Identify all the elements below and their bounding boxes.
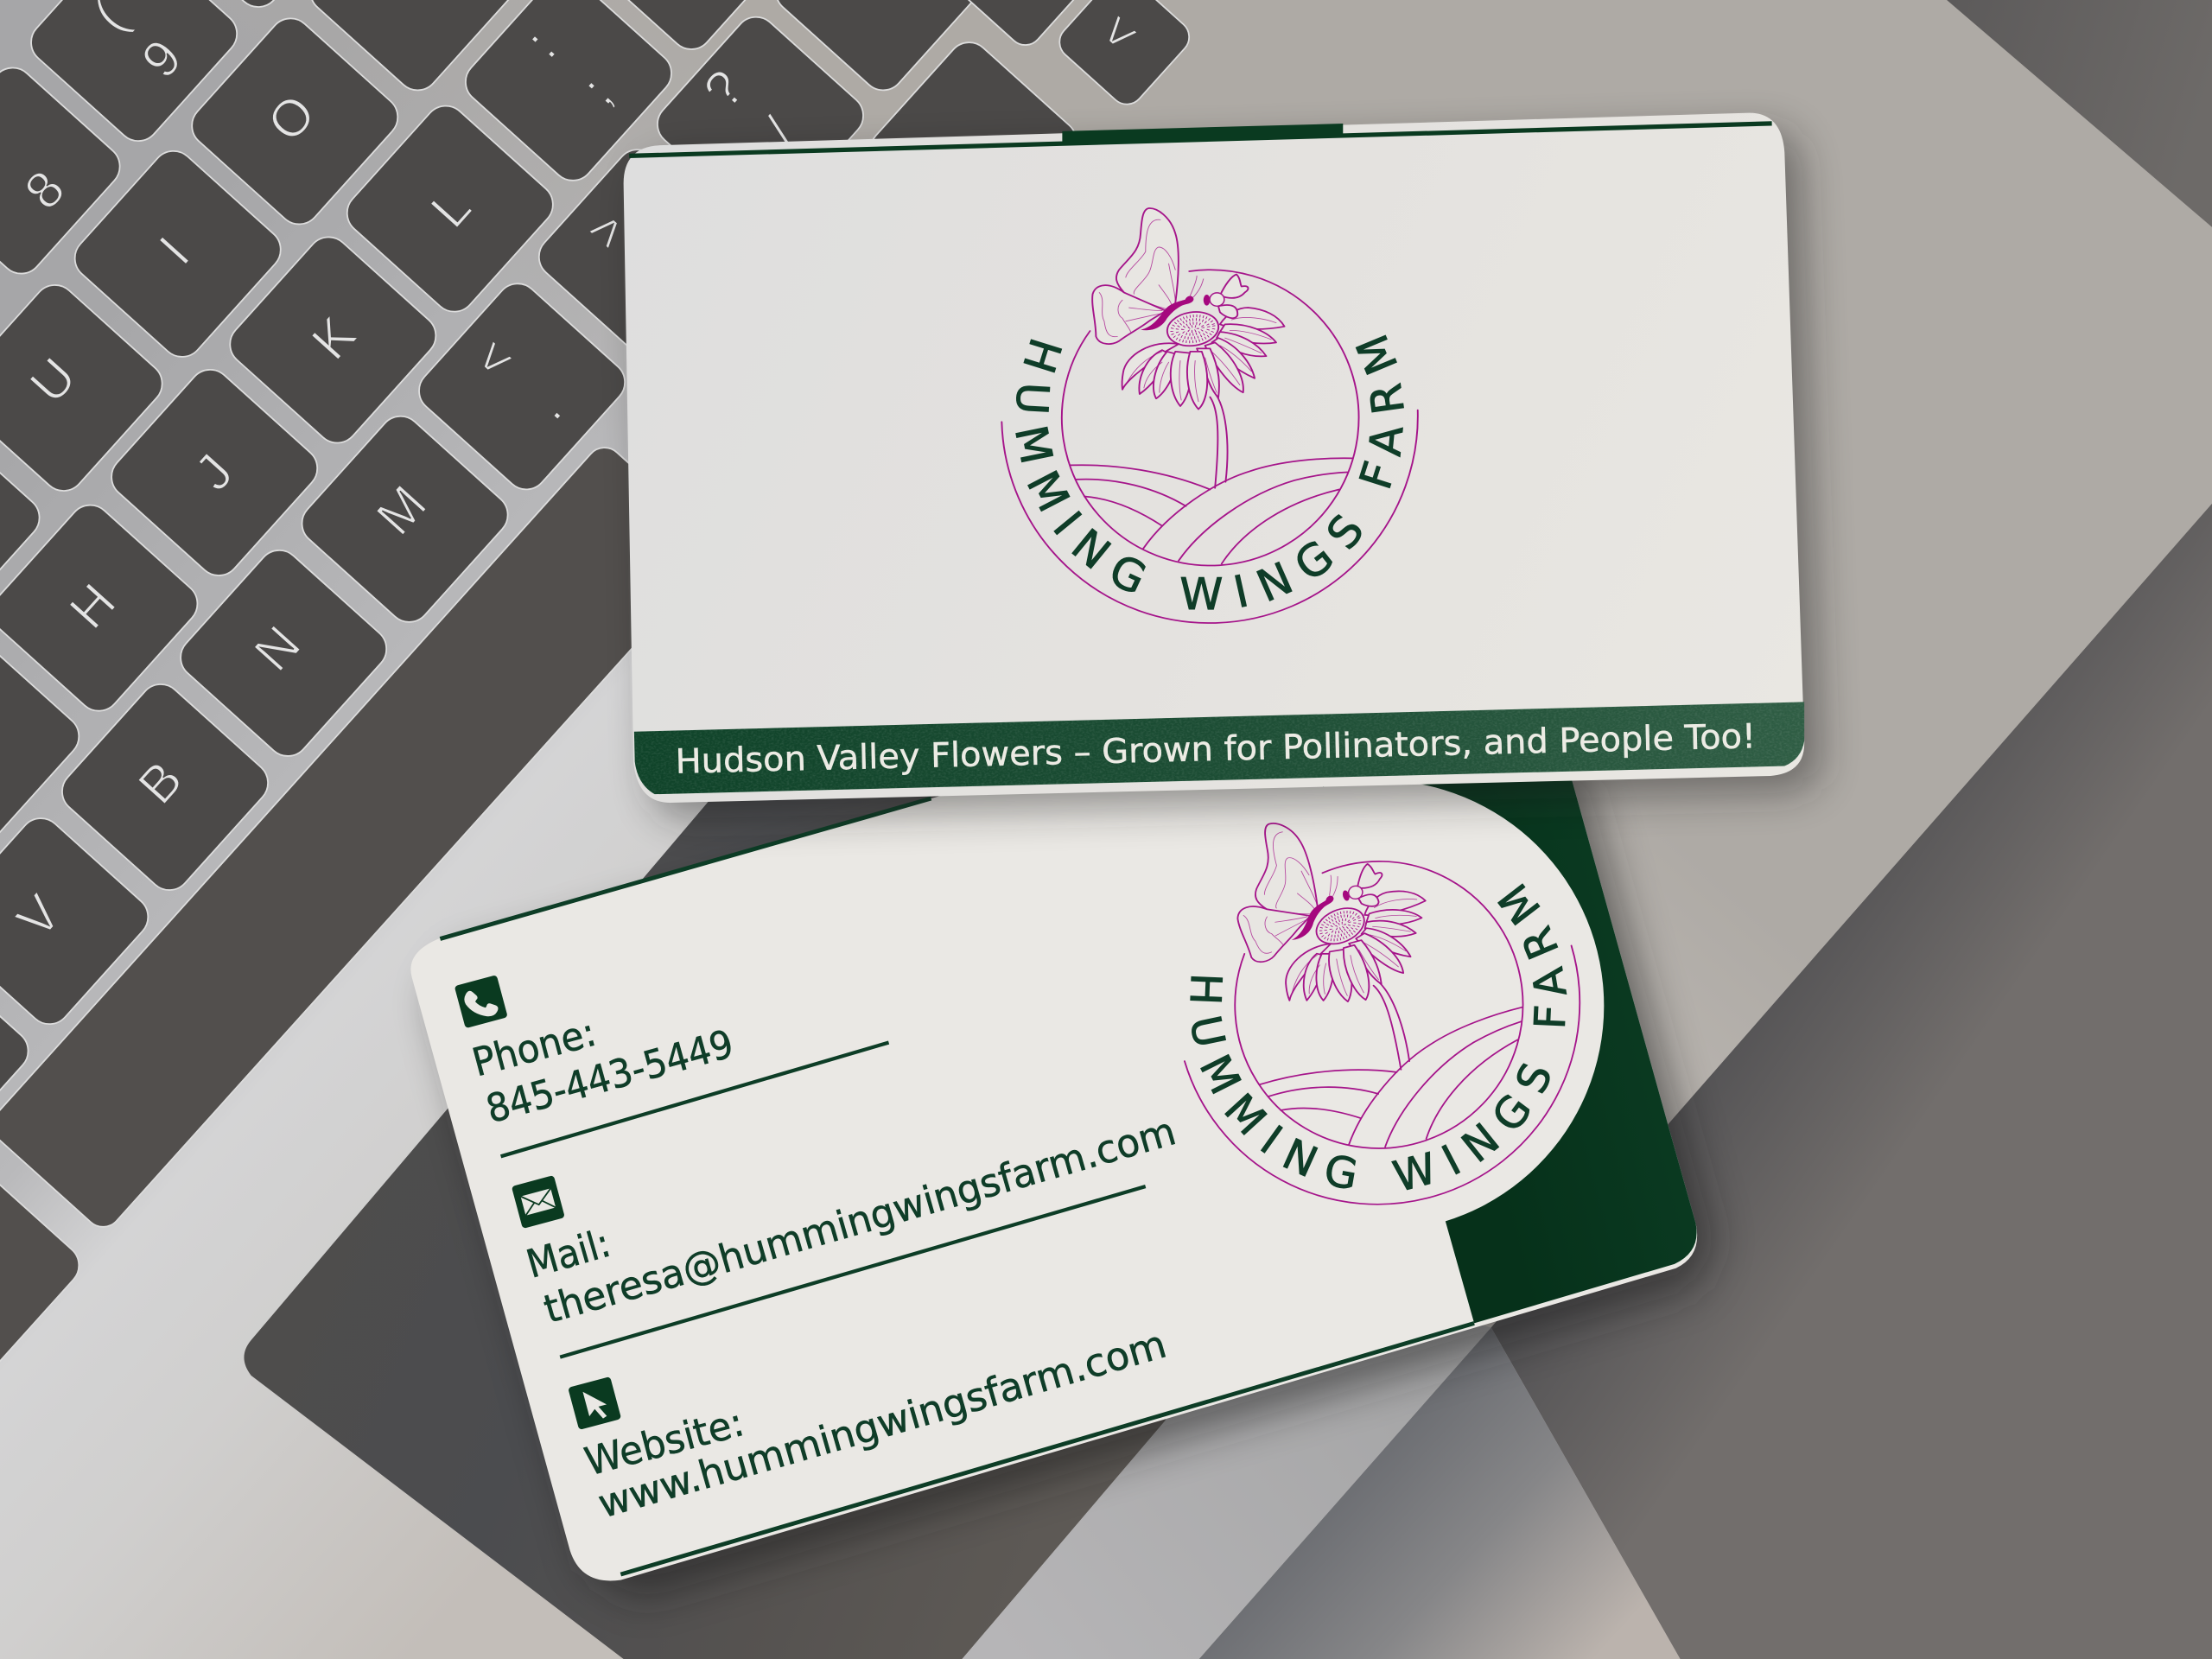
logo: contact card	[1096, 724, 1660, 1205]
phone number: 845-443-5449	[481, 1020, 738, 1132]
website address: www.hummingwingsfarm.com	[593, 1321, 1171, 1527]
key legends: V	[5, 883, 73, 949]
bottom rule	[620, 1323, 1474, 1574]
key legends: ?	[692, 59, 755, 119]
top rule	[440, 798, 931, 939]
tagline band	[634, 702, 1804, 794]
card body	[410, 646, 1697, 1580]
key legends: B	[126, 749, 194, 815]
top rule	[629, 124, 1772, 156]
panel: front card	[624, 112, 1804, 803]
keyboard	[0, 0, 1196, 1382]
dark surface top right	[1947, 0, 2212, 227]
circular logo plate	[1153, 780, 1604, 1231]
laptop hinge wedge shaded	[1199, 1327, 1680, 1659]
key legends: H	[58, 572, 127, 639]
key legends: N	[243, 614, 311, 682]
dark surface bottom right	[1491, 504, 2212, 1659]
phone label: Phone:	[467, 1009, 601, 1085]
key caps	[0, 0, 1196, 1382]
laptop hinge wedge light	[962, 1269, 1491, 1659]
key legends: L	[419, 177, 482, 238]
icon: cursor	[568, 1376, 621, 1430]
key legends: <	[461, 327, 525, 390]
key legends: J	[183, 442, 244, 501]
logo wordmark: HUMMING WINGS FARM	[1015, 335, 1404, 610]
key legends: K	[300, 305, 367, 371]
logo: front card	[1001, 207, 1419, 624]
email address: theresa@hummingwingsfarm.com	[539, 1108, 1180, 1332]
band texture	[634, 702, 1804, 794]
panel: contact card	[411, 781, 1697, 1581]
key legends: :	[513, 19, 567, 69]
key legends: I	[148, 226, 200, 276]
phone divider	[501, 1043, 889, 1156]
top accent block	[1062, 124, 1343, 144]
icon: phone	[454, 975, 508, 1028]
key legends: >	[575, 199, 639, 261]
shadow of upper card	[640, 130, 1821, 818]
trackpad	[244, 705, 1411, 1659]
tagline: Hudson Valley Flowers – Grown for Pollinators, and People Too!	[675, 717, 1757, 782]
key legends: /	[753, 106, 807, 156]
key legends: 9	[130, 28, 193, 89]
green corner block	[1312, 747, 1697, 1323]
key legends: ;	[570, 66, 623, 116]
card body	[624, 113, 1804, 803]
key legends	[5, 0, 1151, 949]
key legends: 8	[13, 159, 76, 220]
key legends: M	[365, 474, 437, 546]
mail label: Mail:	[521, 1220, 615, 1287]
shadow of lower card	[432, 666, 1715, 1599]
logo wordmark: HUMMING WINGS FARM	[1190, 883, 1567, 1191]
key legends: <	[1086, 2, 1151, 64]
key legends: U	[18, 346, 87, 414]
website label: Website:	[580, 1399, 748, 1484]
mail divider	[560, 1186, 1146, 1357]
key legends: .	[519, 380, 573, 430]
key legends: O	[256, 83, 327, 152]
space bar	[0, 440, 722, 1235]
icon: mail	[512, 1175, 565, 1229]
